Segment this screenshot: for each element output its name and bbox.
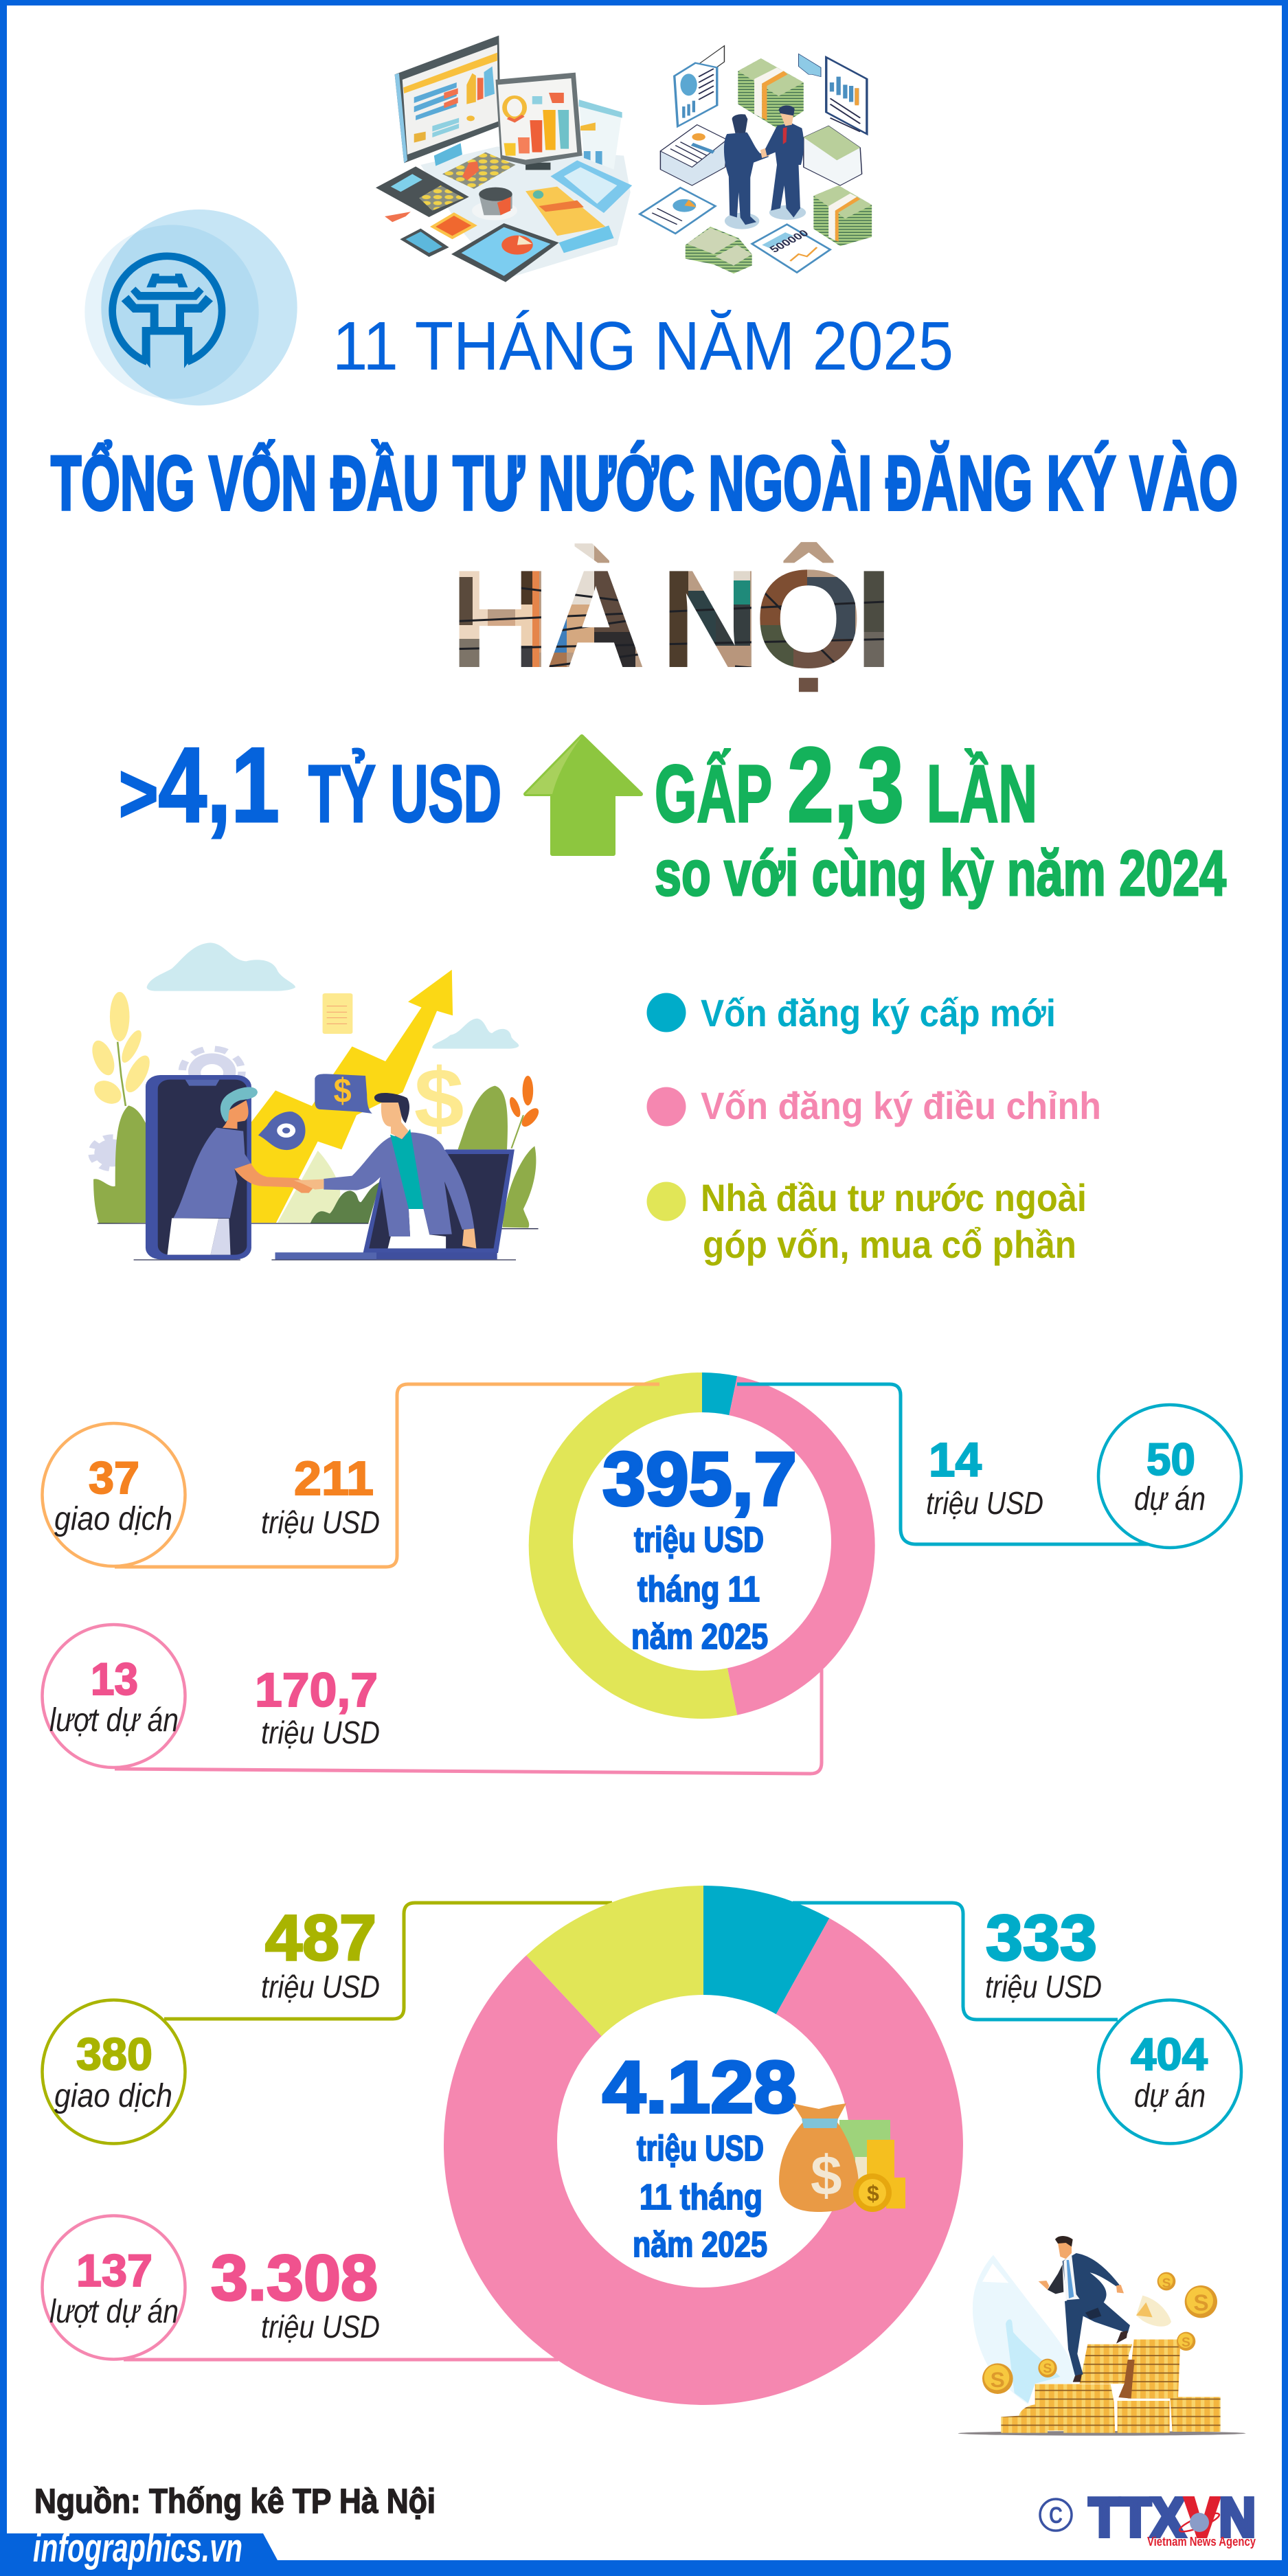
callout: orange 37 transactions [43,1423,185,1566]
illustration: office dashboards and desk items [376,36,632,282]
icon: yellow leaves [88,992,155,1108]
callout: pink 137 project turns: 137 [76,2245,152,2296]
legend [647,991,1101,1266]
bottom bar and website tab [0,2526,1288,2576]
connector: orange [115,1384,659,1567]
icon: chat bubble [799,54,821,77]
connector: teal [793,1903,1118,2020]
icon: blue card [559,225,614,253]
callout: teal value 333: 333 [986,1901,1097,1974]
icon: paper stack [660,125,727,185]
icon: coins: S [1043,2362,1052,2376]
icon: pale mountain [973,2255,1076,2404]
label: GẤP: GẤP [655,748,772,839]
value: greater than 4,1: >4,1 [119,725,280,844]
icon: ground shadow [958,2431,1245,2436]
callout: pink value 3.308: triệu USD [261,2309,380,2345]
icon: money pile [686,227,752,273]
legend item: adjusted registered capital: Vốn đăng ký điều chỉnh [701,1084,1101,1127]
legend item: foreign investors contribution [647,1176,1087,1266]
headline stat: growth compared with 2024 [655,725,1226,909]
icon: report with pie chart [675,46,724,126]
callout: olive value 487: 487 [265,1901,376,1974]
connector: pink [124,2358,558,2362]
callout: orange value 211 [261,1451,380,1540]
icon: report with pie [640,188,715,234]
headline stat: total capital [119,725,501,844]
icon: pale hill [278,1151,340,1223]
icon: far right leaf [503,1146,536,1228]
icon: coins: S [1182,2336,1190,2350]
callout: orange value 211: triệu USD [261,1504,380,1540]
icon: phone [400,229,449,257]
icon: lower tablet with pie chart [451,223,559,282]
icon: keyboard [442,152,516,189]
icon: coins: S [1193,2290,1209,2316]
chart: November 2025 donut panel [43,1372,1241,1774]
donut center label: 4.128 [602,2046,797,2128]
callout: teal value 14 [926,1433,1043,1521]
connector: teal [737,1384,1171,1544]
icon: money stack right [804,126,862,185]
callout: pink 137 project turns: lượt dự án [49,2294,179,2330]
callout: pink 137 project turns [43,2216,185,2359]
date heading: 11 THÁNG NĂM 2025 [332,308,953,385]
icon: gear speech bubble [258,1111,306,1150]
illustration: businessman climbing coin stacks [958,2236,1245,2436]
icon: 500000 document: 500000 [767,227,811,255]
callout: orange 37 transactions: 37 [89,1452,139,1503]
callout: pink 13 project turns [43,1625,185,1767]
callout: olive 380 transactions: 380 [76,2029,152,2079]
illustration: handshake between phone and laptop [88,942,542,1260]
source note: Nguồn: Thống kê TP Hà Nội [34,2482,436,2520]
donut center label [602,2046,797,2265]
icon: person at laptop [294,1093,476,1248]
callout: orange value 211: 211 [294,1451,374,1505]
wordmark: TTXVN: TTXVN [1089,2487,1256,2548]
donut chart: 4.128 million USD [444,1886,963,2405]
icon: left businessman [724,114,769,225]
icon: money bag with coins: $ [867,2181,879,2206]
callout: teal 50 projects: dự án [1134,1481,1206,1517]
callout: teal 404 projects: dự án [1134,2078,1206,2114]
icon: copyright symbol: C [1049,2502,1063,2529]
title: Hà Nội photo-filled lettering: HÀ NỘI [450,541,893,697]
donut center label: triệu USD [637,2129,764,2169]
chart: 11 months 2025 donut panel [43,1886,1241,2405]
callout: pink value 170,7 [255,1663,380,1750]
icon: money stack top [738,58,804,128]
icon: coffee cup [472,188,517,221]
icon: orange leaves [508,1076,542,1149]
icon: desktop monitor [395,36,501,166]
icon: dollar speech bubble [315,1072,372,1114]
callout: pink value 170,7: 170,7 [255,1663,378,1717]
icon: dollar speech bubble: $ [334,1072,352,1110]
callout: teal 50 projects: 50 [1146,1434,1195,1484]
icon: desk shadow [420,146,631,280]
icon: large cloud [147,942,295,991]
icon: shadows under businessmen [725,205,806,229]
callout: olive value 487: triệu USD [261,1969,380,2004]
donut center label: triệu USD [634,1520,764,1560]
donut chart: 395,7 million USD [529,1372,875,1719]
icon: money bag with coins: $ [811,2145,842,2207]
icon: orange card [430,212,477,239]
callout: olive 380 transactions: giao dịch [54,2078,172,2114]
icon: bar chart report [826,57,867,134]
tagline: Vietnam News Agency [1147,2535,1256,2549]
icon: ground lines [98,1223,539,1260]
donut center label: năm 2025 [631,1617,768,1657]
icon: right plant [457,1086,508,1149]
logo: TTXVN copyright mark [1040,2487,1256,2549]
illustration: business handshake and money [640,46,872,273]
icon: laptop [275,1149,515,1259]
callout: pink 13 project turns: 13 [91,1653,138,1704]
label: LẦN: LẦN [927,748,1037,839]
icon: tablet with charts [495,73,622,170]
icon: money stack lower right [813,185,872,246]
connector: pink [115,1669,822,1774]
legend item: foreign investors contribution: góp vốn, mua cổ phần [703,1223,1076,1266]
logo: Hanoi emblem [84,210,297,405]
callout: teal 404 projects [1098,2000,1241,2143]
callout: teal value 333 [985,1901,1102,2004]
callout: pink value 170,7: triệu USD [261,1715,380,1750]
icon: small cloud [432,1019,519,1049]
icon: coin stacks [1001,2340,1221,2433]
icon: phone [146,1075,251,1259]
callout: olive 380 transactions [43,2000,185,2143]
legend item: new registered capital: Vốn đăng ký cấp mới [701,991,1056,1035]
icon: coins [982,2272,1217,2394]
icon: 500000 document [752,225,831,273]
icon: globe [1178,2510,1221,2535]
icon: blue document [550,160,632,213]
icon: copyright symbol [1040,2499,1072,2531]
icon: crack between coin stacks [1118,2360,1135,2399]
donut center label: tháng 11 [637,1570,760,1609]
callout: teal value 333: triệu USD [985,1969,1102,2004]
icon: coins: S [991,2367,1005,2392]
icon: green up arrow [526,736,641,854]
callout: teal 404 projects: 404 [1131,2029,1208,2079]
bottom bar and website tab: infographics.vn [33,2526,242,2571]
icon: left plant [93,1105,146,1223]
callout: pink value 3.308: 3.308 [211,2241,378,2314]
unit: billion USD: TỶ USD [308,748,501,839]
donut center label: 11 tháng [640,2178,762,2217]
icon: person in phone [168,1087,315,1255]
legend item: foreign investors contribution: Nhà đầu tư nước ngoài [701,1176,1087,1219]
icon: coins: S [1162,2276,1171,2291]
value: 2,3: 2,3 [787,725,904,844]
icon: calculator [376,166,469,222]
icon: money bag with coins [779,2103,905,2212]
icon: dark bush [310,1182,381,1223]
donut center label: năm 2025 [633,2225,767,2265]
callout: teal value 14: 14 [929,1433,982,1487]
callout: pink value 3.308 [211,2241,380,2345]
icon: yellow document [526,187,605,236]
icon: businessman [1039,2236,1130,2382]
connector: olive [164,1903,612,2019]
icon: yellow rising arrow [251,970,453,1223]
icon: right businessman [765,106,804,218]
donut center label [602,1437,797,1657]
callout: pink 13 project turns: lượt dự án [49,1702,179,1739]
icon: pale dollar sign: $ [414,1051,464,1146]
callout: teal value 14: triệu USD [926,1485,1043,1521]
callout: teal 50 projects [1098,1405,1241,1548]
icon: gears [91,1049,242,1169]
callout: orange 37 transactions: giao dịch [54,1501,172,1537]
callout: olive value 487 [261,1901,380,2004]
icon: falling triangle token [1136,2296,1171,2327]
donut center label: 395,7 [602,1437,797,1522]
icon: note [323,993,352,1034]
